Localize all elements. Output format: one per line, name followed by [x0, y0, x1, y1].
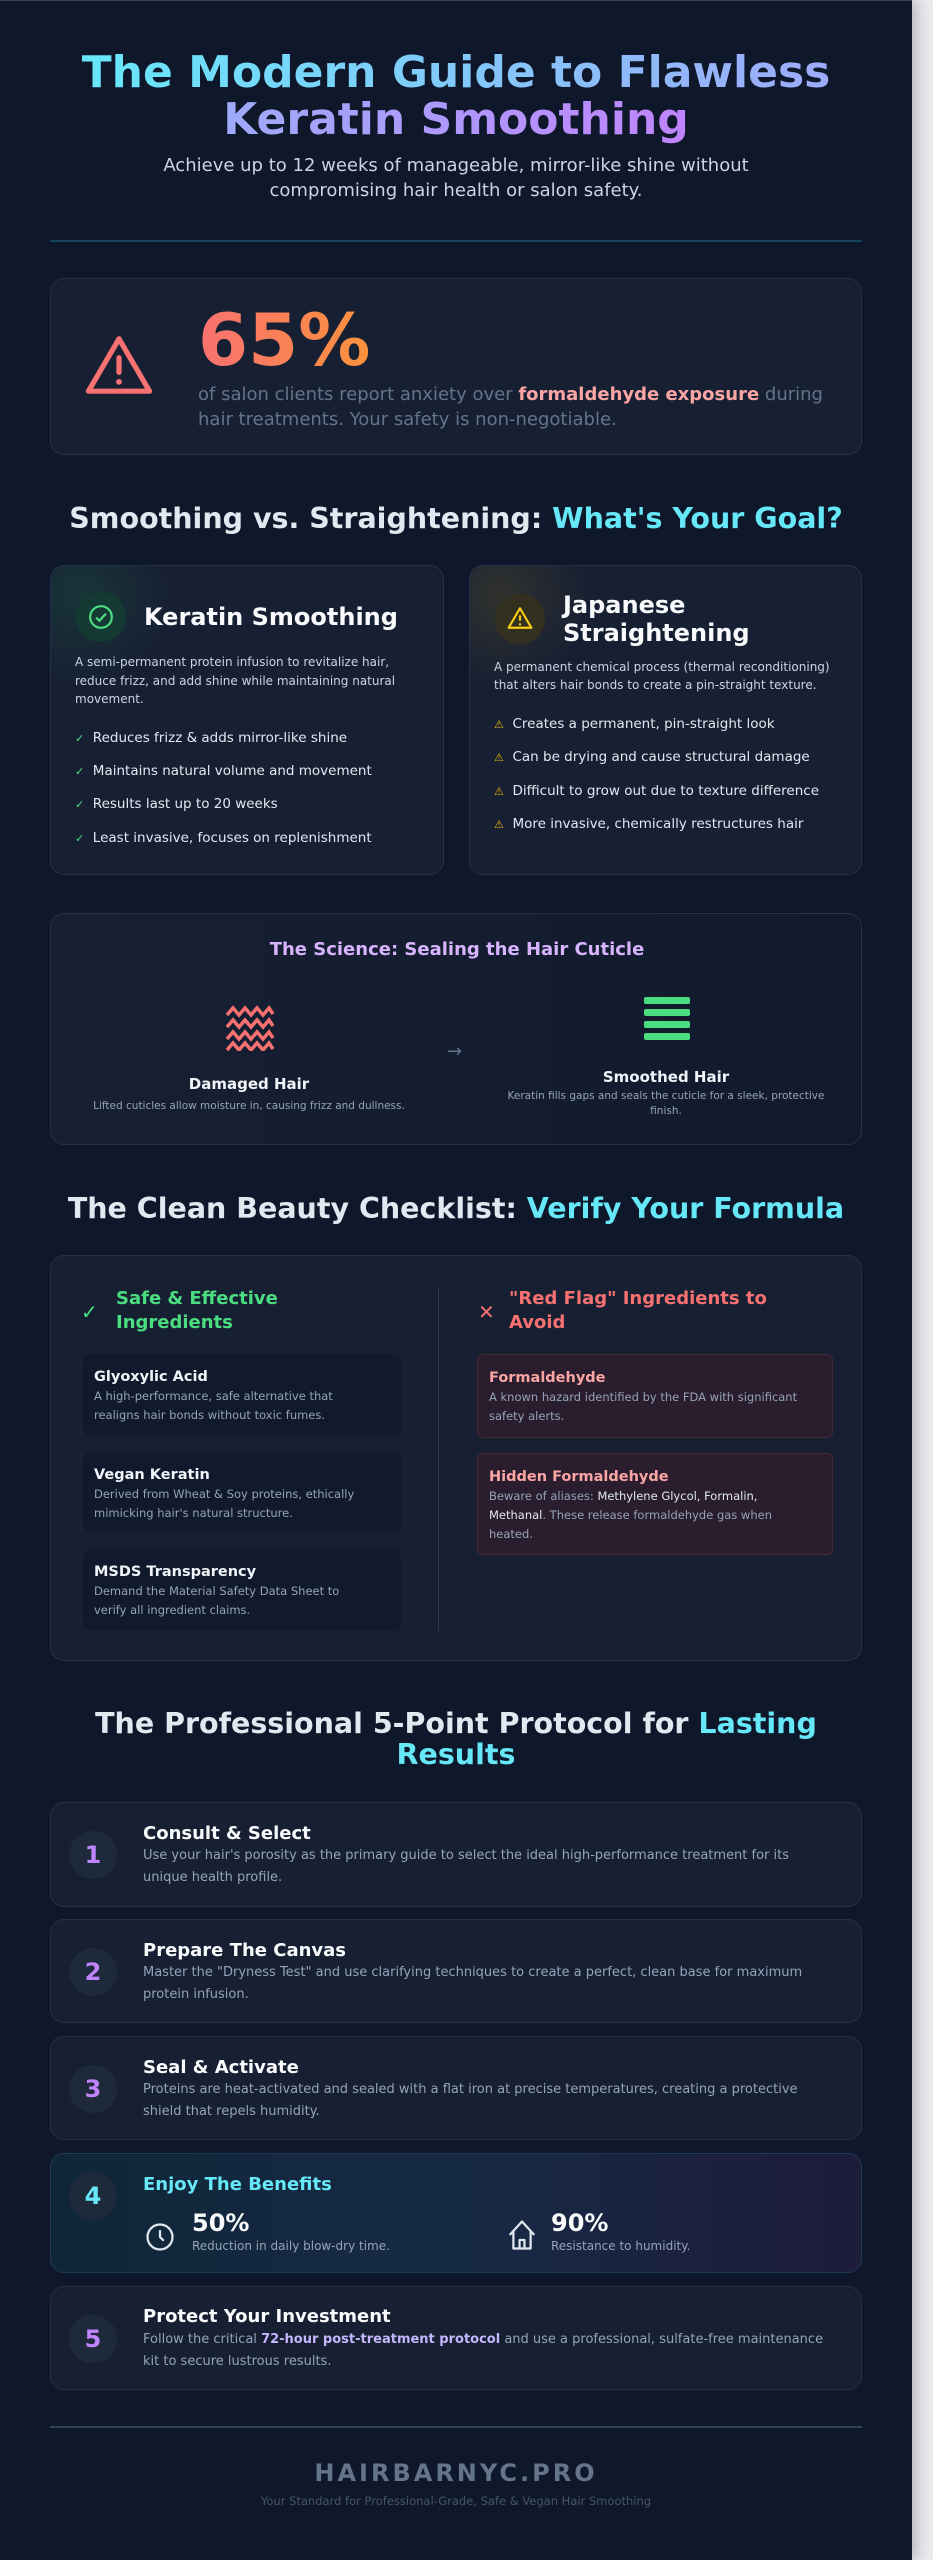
smoothed hair label: Keratin fills gaps and seals the cuticle for a sleek, protective finish.: [508, 1090, 824, 1117]
step 4: benefits: Enjoy The Benefits: [143, 2174, 332, 2195]
heading: comparison: Smoothing vs. Straightening: What's Your Goal?: [69, 502, 843, 535]
step 3: Seal & Activate: [143, 2057, 299, 2078]
benefits list: [75, 730, 372, 846]
step 5: Protect Your Investment: [143, 2306, 391, 2327]
avoid column header: [478, 1288, 767, 1333]
heading: checklist: The Clean Beauty Checklist: Verify Your Formula: [68, 1192, 844, 1225]
panel: checklist: [50, 1255, 862, 1661]
icon: smoothed hair lines: [644, 997, 690, 1040]
icon: house: [508, 2220, 536, 2250]
safe item: vegan keratin: Vegan Keratin: [94, 1467, 210, 1483]
heading: protocol: The Professional 5-Point Protocol for Lasting: [95, 1707, 817, 1740]
card description: A permanent chemical process (thermal reconditioning) that alters hair bonds to create a pin-straight texture.: [494, 660, 830, 692]
icon: warning circle: [495, 594, 545, 644]
subtitle: compromising hair health or salon safety.: [270, 180, 642, 201]
avoid item: formaldehyde: Formaldehyde: [489, 1370, 606, 1386]
panel: japanese straightening: [469, 565, 862, 875]
safe item: msds: Demand the Material Safety Data Sheet to verify all ingredient claims.: [94, 1584, 339, 1617]
science title: The Science: Sealing the Hair Cuticle: [270, 939, 644, 960]
icon: clock: [146, 2223, 174, 2251]
avoid column header: Avoid: [509, 1312, 565, 1333]
benefit stat: humidity: 90%: [551, 2209, 608, 2237]
benefits list: ✓ Least invasive, focuses on replenishment: [75, 830, 372, 846]
step 5: Follow the critical 72-hour post-treatment protocol and use a professional, sulfate-free maintenance kit to secure lustrous results.: [143, 2332, 823, 2368]
panel: keratin smoothing: [50, 565, 444, 875]
step 5: [50, 2286, 862, 2390]
step 1: 1: [85, 1841, 101, 1869]
card description: A semi-permanent protein infusion to revitalize hair, reduce frizz, and add shine while maintaining natural movement.: [75, 655, 395, 706]
step 1: Consult & Select: [143, 1823, 311, 1844]
benefit stat: blow-dry: 50%: [192, 2209, 249, 2237]
avoid column header: "Red Flag" Ingredients to: [509, 1288, 767, 1309]
step 4: benefits: 4: [85, 2182, 101, 2210]
safe column header: [81, 1288, 278, 1333]
step 2: [50, 1919, 862, 2023]
step 3: 3: [85, 2075, 101, 2103]
step 2: Master the "Dryness Test" and use clarifying techniques to create a perfect, clean base for maximum protein infusion.: [143, 1965, 802, 2002]
avoid item: hidden formaldehyde: Beware of aliases: Methylene Glycol, Formalin, Methanal. These release formaldehyde gas when heated.: [489, 1489, 772, 1541]
drawbacks list: [494, 716, 819, 832]
avoid item: formaldehyde: [477, 1354, 833, 1438]
arrow: →: [447, 1041, 462, 1062]
benefit stat: blow-dry: Reduction in daily blow-dry time.: [192, 2239, 390, 2253]
smoothed hair label: Smoothed Hair: [603, 1068, 729, 1086]
heading: protocol: [95, 1707, 817, 1771]
step 1: [50, 1802, 862, 1907]
benefit stat: humidity: Resistance to humidity.: [551, 2239, 690, 2253]
safe item: glyoxylic: Glyoxylic Acid: [94, 1369, 208, 1385]
panel: science: [50, 913, 862, 1145]
damaged hair label: Damaged Hair: [189, 1075, 309, 1093]
benefit stat: humidity: [508, 2209, 690, 2253]
step 4: benefits: [50, 2153, 862, 2273]
avoid column header: ✕: [478, 1300, 495, 1324]
safe column header: ✓: [81, 1300, 98, 1324]
drawbacks list: ⚠ Difficult to grow out due to texture difference: [494, 783, 819, 799]
icon: damaged hair zigzag: [226, 1005, 274, 1051]
avoid item: hidden formaldehyde: Hidden Formaldehyde: [489, 1469, 669, 1485]
step 3: [50, 2036, 862, 2140]
step 5: 5: [85, 2325, 101, 2353]
safe column header: Ingredients: [116, 1312, 233, 1333]
avoid item: formaldehyde: A known hazard identified by the FDA with significant safety alerts.: [489, 1390, 797, 1423]
heading: protocol: Results: [397, 1738, 515, 1771]
step 3: Proteins are heat-activated and sealed with a flat iron at precise temperatures, creating a protective shield that repels humidity.: [143, 2082, 798, 2118]
drawbacks list: ⚠ Can be drying and cause structural damage: [494, 749, 810, 765]
benefits list: ✓ Maintains natural volume and movement: [75, 763, 372, 779]
footer brand: HAIRBARNYC.PRO: [314, 2459, 598, 2487]
smoothed hair label: [508, 1068, 824, 1117]
card title: Japanese: [563, 591, 685, 619]
safe item: glyoxylic: [83, 1354, 401, 1436]
drawbacks list: ⚠ More invasive, chemically restructures hair: [494, 816, 803, 832]
step 2: 2: [85, 1958, 101, 1986]
stat number: 65%: [198, 298, 370, 382]
step 1: Use your hair's porosity as the primary guide to select the ideal high-performance treatment for its unique health profile.: [143, 1848, 789, 1884]
footer tagline: Your Standard for Professional-Grade, Safe & Vegan Hair Smoothing: [261, 2494, 651, 2508]
avoid item: hidden formaldehyde: [477, 1453, 833, 1555]
stat text: of salon clients report anxiety over formaldehyde exposure during hair treatments. Your safety is non-negotiable.: [198, 384, 823, 430]
title: [82, 47, 830, 145]
safe item: vegan keratin: [83, 1452, 401, 1532]
drawbacks list: ⚠ Creates a permanent, pin-straight look: [494, 716, 775, 732]
subtitle: [163, 155, 749, 201]
card title: Straightening: [563, 619, 750, 647]
damaged hair label: [93, 1075, 405, 1112]
safe item: glyoxylic: A high-performance, safe alternative that realigns hair bonds without toxic fumes.: [94, 1389, 333, 1422]
step 2: Prepare The Canvas: [143, 1940, 346, 1961]
benefits list: ✓ Reduces frizz & adds mirror-like shine: [75, 730, 347, 746]
title: The Modern Guide to Flawless: [82, 47, 830, 98]
benefit stat: blow-dry: [146, 2209, 390, 2253]
damaged hair label: Lifted cuticles allow moisture in, causing frizz and dullness.: [93, 1100, 405, 1112]
safe item: msds: MSDS Transparency: [94, 1564, 256, 1580]
icon: warning triangle: [86, 336, 152, 394]
card title: [562, 591, 750, 647]
panel: safety stat: [50, 278, 862, 455]
subtitle: Achieve up to 12 weeks of manageable, mirror-like shine without: [163, 155, 749, 176]
safe item: vegan keratin: Derived from Wheat & Soy proteins, ethically mimicking hair's natural structure.: [94, 1487, 354, 1520]
safe column header: Safe & Effective: [116, 1288, 278, 1309]
benefits list: ✓ Results last up to 20 weeks: [75, 796, 278, 812]
card title: Keratin Smoothing: [144, 603, 398, 631]
safe item: msds: [83, 1549, 401, 1630]
title: Keratin Smoothing: [223, 94, 689, 145]
icon: check circle: [76, 592, 126, 642]
